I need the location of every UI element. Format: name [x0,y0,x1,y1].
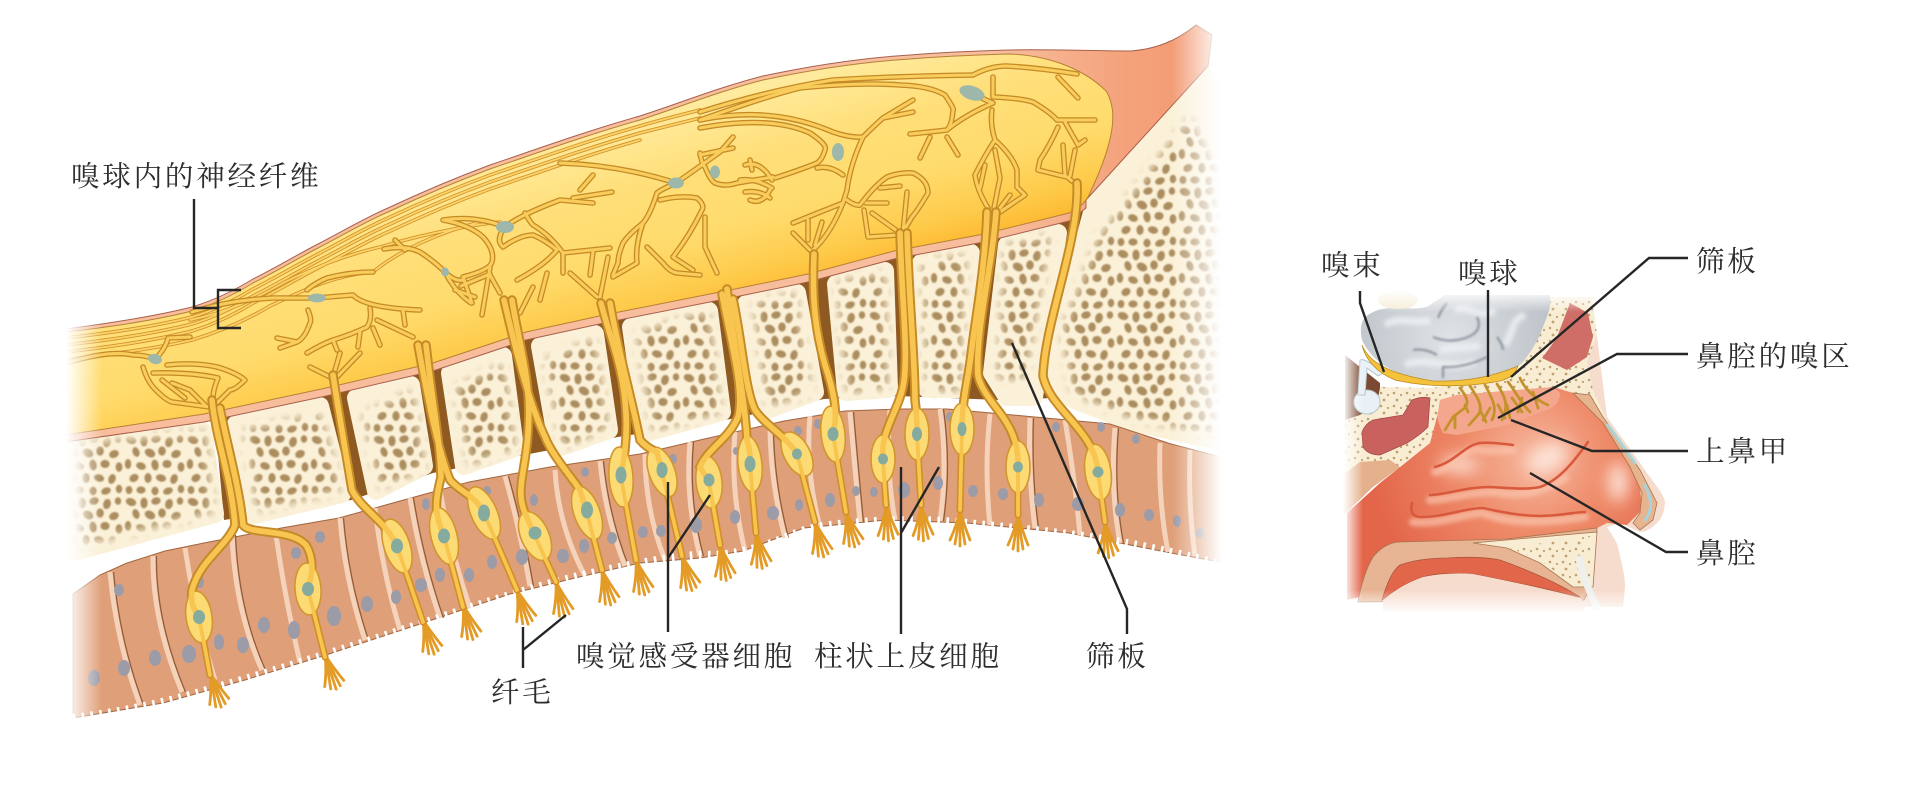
pituitary gland [1354,360,1385,414]
olfactory axon cores [192,183,1105,675]
skull base bone [1345,297,1610,477]
spongy bone texture [76,117,1216,545]
meningeal sheath [65,25,1212,442]
label: olfactory bulb: 嗅球 [1458,258,1521,290]
temporal cream patch [1378,291,1418,309]
olfactory axon outlines through the cribriform plate [192,183,1105,675]
external nose skin [1500,297,1665,607]
nasal conchae folds [1411,442,1588,522]
olfactory receptor cell bodies [183,403,1115,645]
lower lip tissue [1383,573,1585,612]
bottom fade [1340,590,1640,614]
brain frontal lobe [1361,295,1550,381]
olfactory nerve branches [1445,378,1548,430]
dark gaps behind cribriform plate [214,195,1086,520]
label: cribriform plate (main): 筛板 [1086,641,1149,673]
label: nasal cavity: 鼻腔 [1696,538,1759,570]
label: olfactory region of nasal cavity [1498,341,1853,418]
cribriform plate bone segments [74,233,1058,552]
epithelial microvilli fringe [73,522,1225,720]
cell boundary shadows [114,409,1124,705]
dura cavity [1345,355,1380,420]
left fade [1335,295,1363,615]
label: olfactory tract [1321,250,1384,372]
main illustration: olfactory epithelium cross-section [52,0,1234,740]
superior concha with olfactory region [1438,387,1560,435]
frontal sinus [1542,303,1593,370]
mucosal highlights [1440,435,1628,502]
palate mucosa [1358,528,1597,602]
right edge fade [1172,0,1234,600]
label: cilia: 纤毛 [491,677,554,709]
sphenoid sinus [1362,397,1430,455]
label: superior concha: 上鼻甲 [1696,436,1790,468]
label: olfactory bulb [1458,258,1521,377]
oral cavity [1382,557,1580,600]
tooth [1579,559,1597,607]
label: olfactory receptor cells [576,482,795,673]
label: cilia [491,615,566,709]
label: olfactory region of nasal cavity: 鼻腔的嗅区 [1696,341,1853,373]
brain sulci [1385,303,1525,378]
nasal cavity sagittal section [1335,290,1665,615]
olfactory epithelium [73,409,1225,718]
label: columnar epithelial cells: 柱状上皮细胞 [814,641,1002,673]
bone speckle [1345,297,1610,477]
label: nasal cavity [1530,473,1759,570]
columnar epithelial cell boundaries [110,409,1195,705]
label: olfactory receptor cells: 嗅觉感受器细胞 [576,641,795,673]
mitral cell nuclei [147,82,987,366]
label: nerve fibres in olfactory bulb [71,161,321,328]
nasal bone mass [1043,66,1226,452]
label: cribriform plate (inset) [1511,246,1759,377]
hard palate bone [1473,532,1597,587]
top fade [1340,290,1610,312]
mitral and tufted cell dendrites [70,66,1095,407]
olfactory tract fibre bundle [65,110,700,360]
cilia fans [200,504,1119,710]
tan submucosa wedge [1340,460,1400,520]
label: cribriform plate (main) [1012,343,1149,673]
olfactory bulb [65,54,1113,435]
palate bone speckle [1510,536,1590,585]
epithelial cell nuclei [88,412,1204,686]
label: nerve fibres in olfactory bulb: 嗅球内的神经纤维 [71,161,321,193]
receptor cell nuclei [193,422,1104,624]
cartilage highlights [1608,425,1651,520]
nasal cavity lining [1347,387,1642,600]
label: superior concha [1511,420,1790,468]
nasal cartilage band [1573,393,1657,530]
label: olfactory tract: 嗅束 [1321,250,1384,282]
label: columnar epithelial cells [814,467,1002,673]
olfactory bulb crescent [1362,345,1518,386]
label: cribriform plate (inset): 筛板 [1696,246,1759,278]
left edge fade [52,300,102,740]
